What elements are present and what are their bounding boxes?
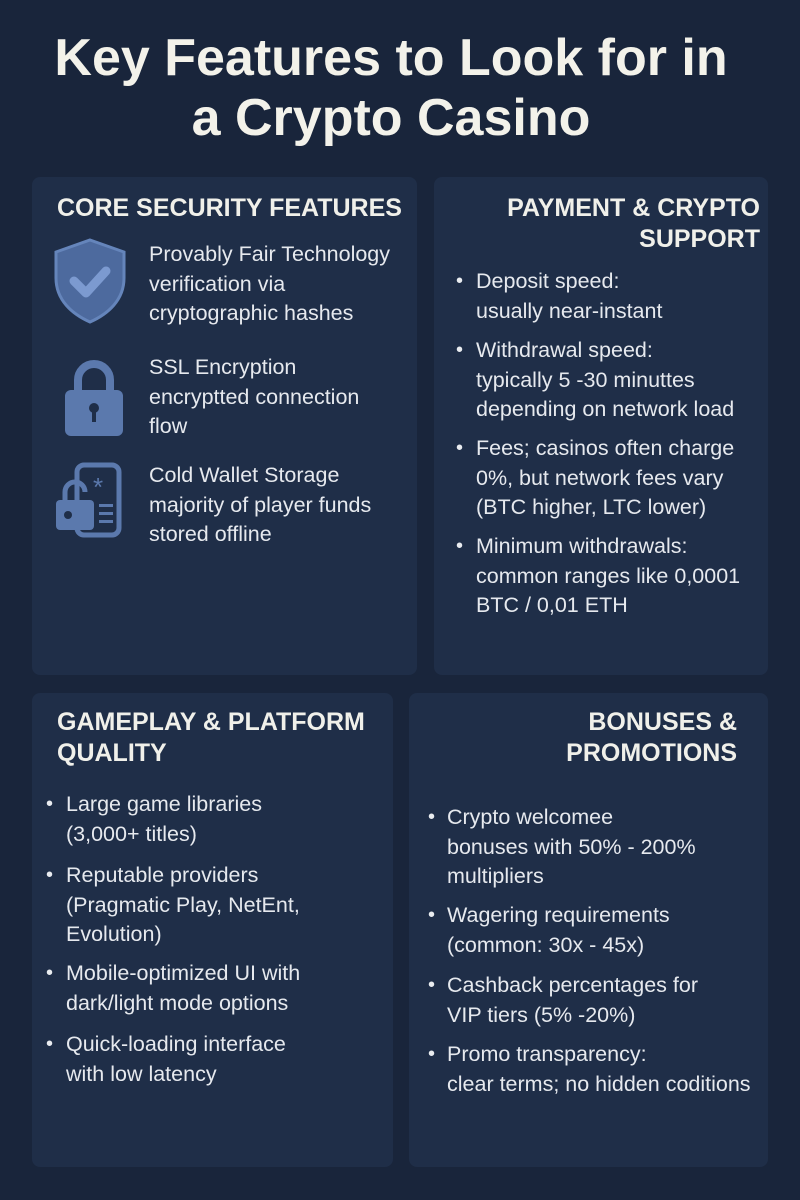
text: common ranges like 0,0001 bbox=[476, 564, 740, 588]
text: Evolution) bbox=[66, 922, 162, 946]
heading: gameplay bbox=[57, 708, 365, 767]
text: cold wallet: stored offline bbox=[149, 522, 272, 546]
text: Reputable providers bbox=[66, 863, 258, 887]
text: • bbox=[46, 864, 53, 886]
text: Minimum withdrawals: bbox=[476, 534, 687, 558]
heading: bonuses: BONUSES & bbox=[588, 708, 737, 736]
text: • bbox=[46, 962, 53, 984]
text: • bbox=[428, 974, 435, 996]
heading: core security: CORE SECURITY FEATURES bbox=[57, 194, 402, 222]
heading: payment: PAYMENT & CRYPTO bbox=[507, 194, 760, 222]
text: (3,000+ titles) bbox=[66, 822, 197, 846]
text: Deposit speed: bbox=[476, 269, 619, 293]
text: multipliers bbox=[447, 864, 544, 888]
text: with low latency bbox=[66, 1062, 217, 1086]
text: • bbox=[46, 1033, 53, 1055]
text: (Pragmatic Play, NetEnt, bbox=[66, 892, 300, 916]
text: • bbox=[456, 339, 463, 361]
text: ssl: flow bbox=[149, 414, 187, 438]
text: • bbox=[428, 904, 435, 926]
text: • bbox=[456, 437, 463, 459]
text: VIP tiers (5% -20%) bbox=[447, 1002, 635, 1026]
title: Key Features to Look for in bbox=[54, 29, 728, 87]
text: typically 5 -30 minuttes bbox=[476, 368, 695, 392]
text: provably fair: verification via bbox=[149, 272, 285, 296]
icon: cold wallet: * bbox=[93, 472, 103, 502]
text: bonuses with 50% - 200% bbox=[447, 834, 696, 858]
heading: gameplay: QUALITY bbox=[57, 739, 167, 767]
list: bonuses bbox=[428, 805, 751, 1096]
text: Quick-loading interface bbox=[66, 1032, 286, 1056]
text: provably fair: Provably Fair Technology bbox=[149, 242, 390, 266]
text: Wagering requirements bbox=[447, 903, 670, 927]
text: usually near-instant bbox=[476, 298, 662, 322]
heading: bonuses bbox=[566, 708, 737, 767]
text: 0%, but network fees vary bbox=[476, 466, 723, 490]
heading: payment: SUPPORT bbox=[639, 225, 760, 253]
text: ssl: encryptted connection bbox=[149, 384, 359, 408]
text: (BTC higher, LTC lower) bbox=[476, 495, 706, 519]
text: dark/light mode options bbox=[66, 990, 288, 1014]
heading: payment bbox=[507, 194, 760, 253]
text: depending on network load bbox=[476, 397, 734, 421]
text: cold wallet: Cold Wallet Storage bbox=[149, 463, 339, 487]
text: cold wallet bbox=[149, 463, 371, 546]
title: a Crypto Casino bbox=[192, 89, 590, 147]
text: provably fair: cryptographic hashes bbox=[149, 301, 353, 325]
text: ssl: SSL Encryption bbox=[149, 355, 296, 379]
text: Fees; casinos often charge bbox=[476, 436, 734, 460]
panel: payment bbox=[434, 177, 768, 675]
icon: shield bbox=[54, 238, 126, 324]
text: • bbox=[428, 806, 435, 828]
text: • bbox=[46, 793, 53, 815]
text: provably fair bbox=[149, 242, 390, 325]
text: ssl bbox=[149, 355, 359, 438]
panel: gameplay bbox=[32, 693, 393, 1167]
text: (common: 30x - 45x) bbox=[447, 932, 644, 956]
heading: bonuses: PROMOTIONS bbox=[566, 739, 737, 767]
panel: bonuses bbox=[409, 693, 768, 1167]
text: • bbox=[456, 535, 463, 557]
icon: lock bbox=[65, 360, 123, 436]
title bbox=[54, 29, 728, 147]
text: Cashback percentages for bbox=[447, 973, 698, 997]
heading: gameplay: GAMEPLAY & PLATFORM bbox=[57, 708, 365, 736]
list: gameplay bbox=[46, 792, 300, 1086]
text: Promo transparency: bbox=[447, 1042, 647, 1066]
text: Large game libraries bbox=[66, 792, 262, 816]
text: BTC / 0,01 ETH bbox=[476, 593, 628, 617]
icon: cold wallet bbox=[56, 462, 122, 538]
text: clear terms; no hidden coditions bbox=[447, 1072, 751, 1096]
text: • bbox=[428, 1043, 435, 1065]
text: • bbox=[456, 270, 463, 292]
text: Crypto welcomee bbox=[447, 805, 613, 829]
text: Mobile-optimized UI with bbox=[66, 961, 300, 985]
text: Withdrawal speed: bbox=[476, 338, 653, 362]
list: payment bbox=[456, 269, 740, 617]
text: cold wallet: majority of player funds bbox=[149, 492, 371, 516]
panel: core security bbox=[32, 177, 417, 675]
